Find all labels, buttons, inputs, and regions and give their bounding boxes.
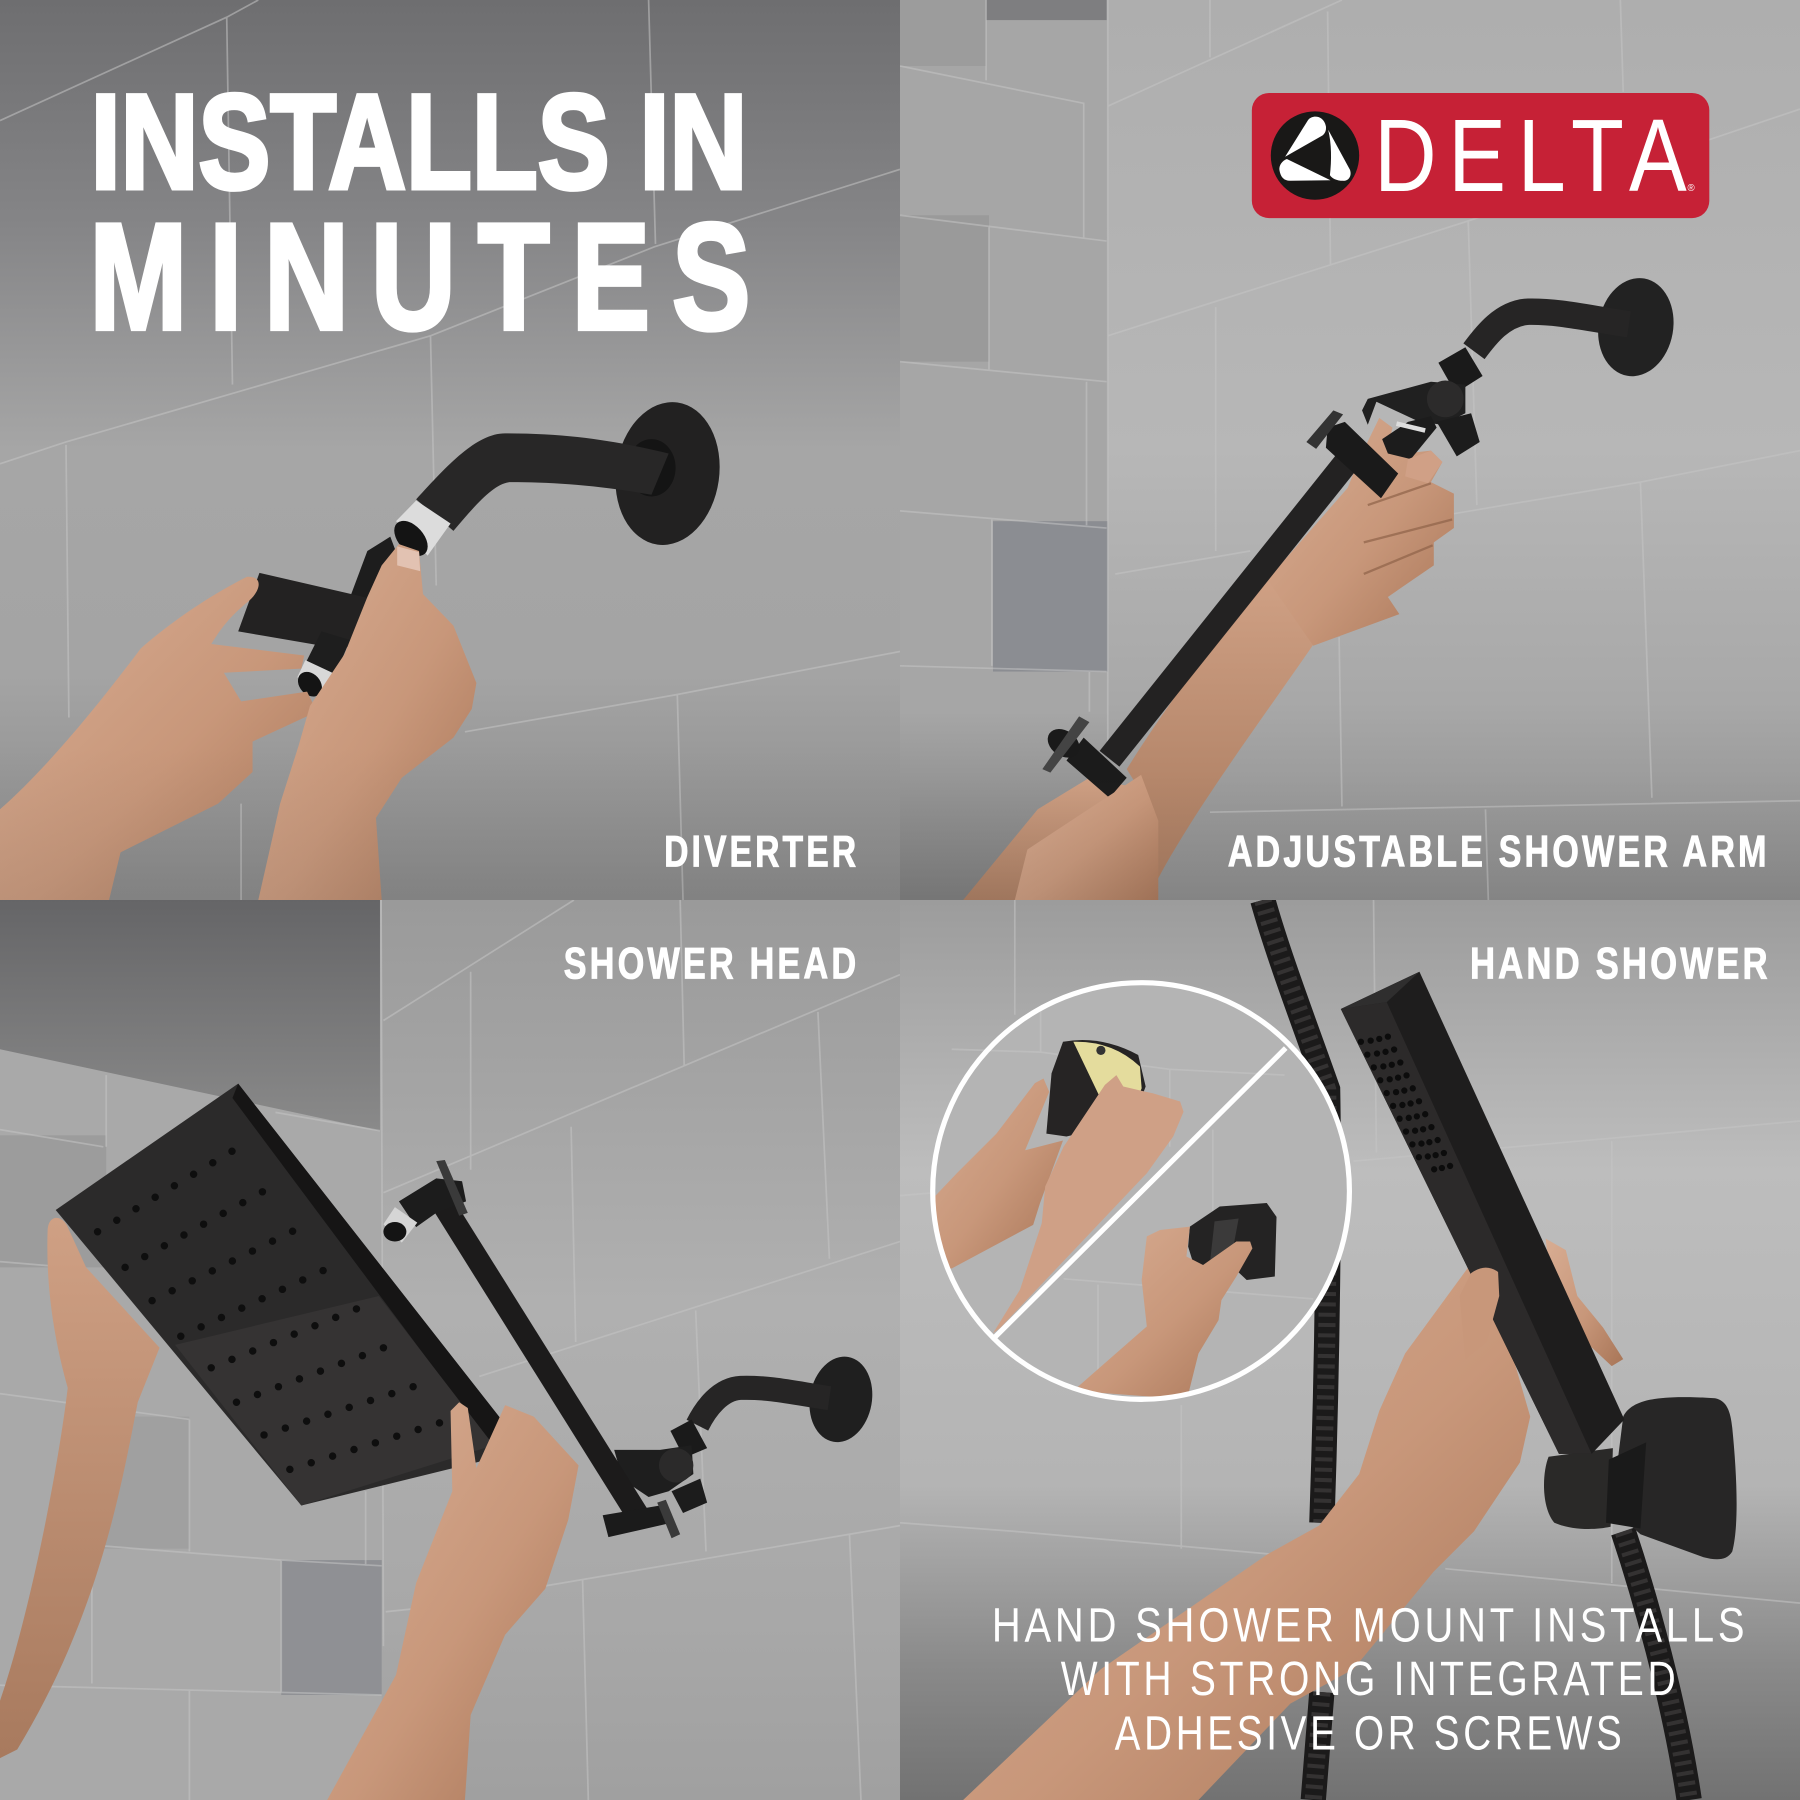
panel: adjustable shower arm bbox=[900, 0, 1800, 900]
caption: mount installs bbox=[992, 1599, 1748, 1760]
logo: delta bbox=[1252, 93, 1709, 218]
diverter body bbox=[238, 537, 399, 701]
shower arm with flange bbox=[388, 395, 729, 562]
inset: hand pressing holder bbox=[1073, 1227, 1252, 1399]
hand shower wand bbox=[1341, 972, 1624, 1454]
thumb over wand bbox=[1460, 1268, 1499, 1359]
inset: adhesive mount bbox=[1046, 1040, 1146, 1136]
background: side wall tiles bbox=[900, 0, 1108, 900]
panel: diverter bbox=[0, 0, 900, 900]
fingertip and lower hand bbox=[1015, 451, 1442, 900]
inset circle bbox=[923, 983, 1349, 1399]
heading: installs in minutes: INSTALLS IN bbox=[91, 66, 747, 217]
left arm and hand bbox=[0, 1218, 160, 1758]
caption: mount installs: ADHESIVE OR SCREWS bbox=[1115, 1706, 1626, 1760]
wall mount bbox=[1544, 1397, 1737, 1559]
alcove bbox=[0, 900, 382, 1800]
hose bbox=[1263, 900, 1689, 1800]
right arm and hand bbox=[327, 1402, 579, 1800]
panel: hand shower bbox=[900, 900, 1800, 1800]
panel: shower head bbox=[0, 900, 900, 1800]
hands holding diverter bbox=[0, 544, 476, 900]
inset: left hand bbox=[923, 1079, 1063, 1268]
logo: delta: DELTA bbox=[1374, 98, 1698, 213]
adjustable arm bbox=[1042, 272, 1681, 798]
logo: delta: ® bbox=[1688, 183, 1696, 194]
forearm and gripping hand bbox=[963, 418, 1454, 900]
inset: mounted holder bbox=[1188, 1203, 1277, 1280]
rain shower head bbox=[56, 1084, 508, 1506]
heading: installs in minutes bbox=[90, 66, 773, 362]
forearm and hand bbox=[963, 1239, 1623, 1800]
inset: right hand peeling backing bbox=[993, 1075, 1184, 1333]
adjustable arm on wall bbox=[383, 1160, 879, 1538]
